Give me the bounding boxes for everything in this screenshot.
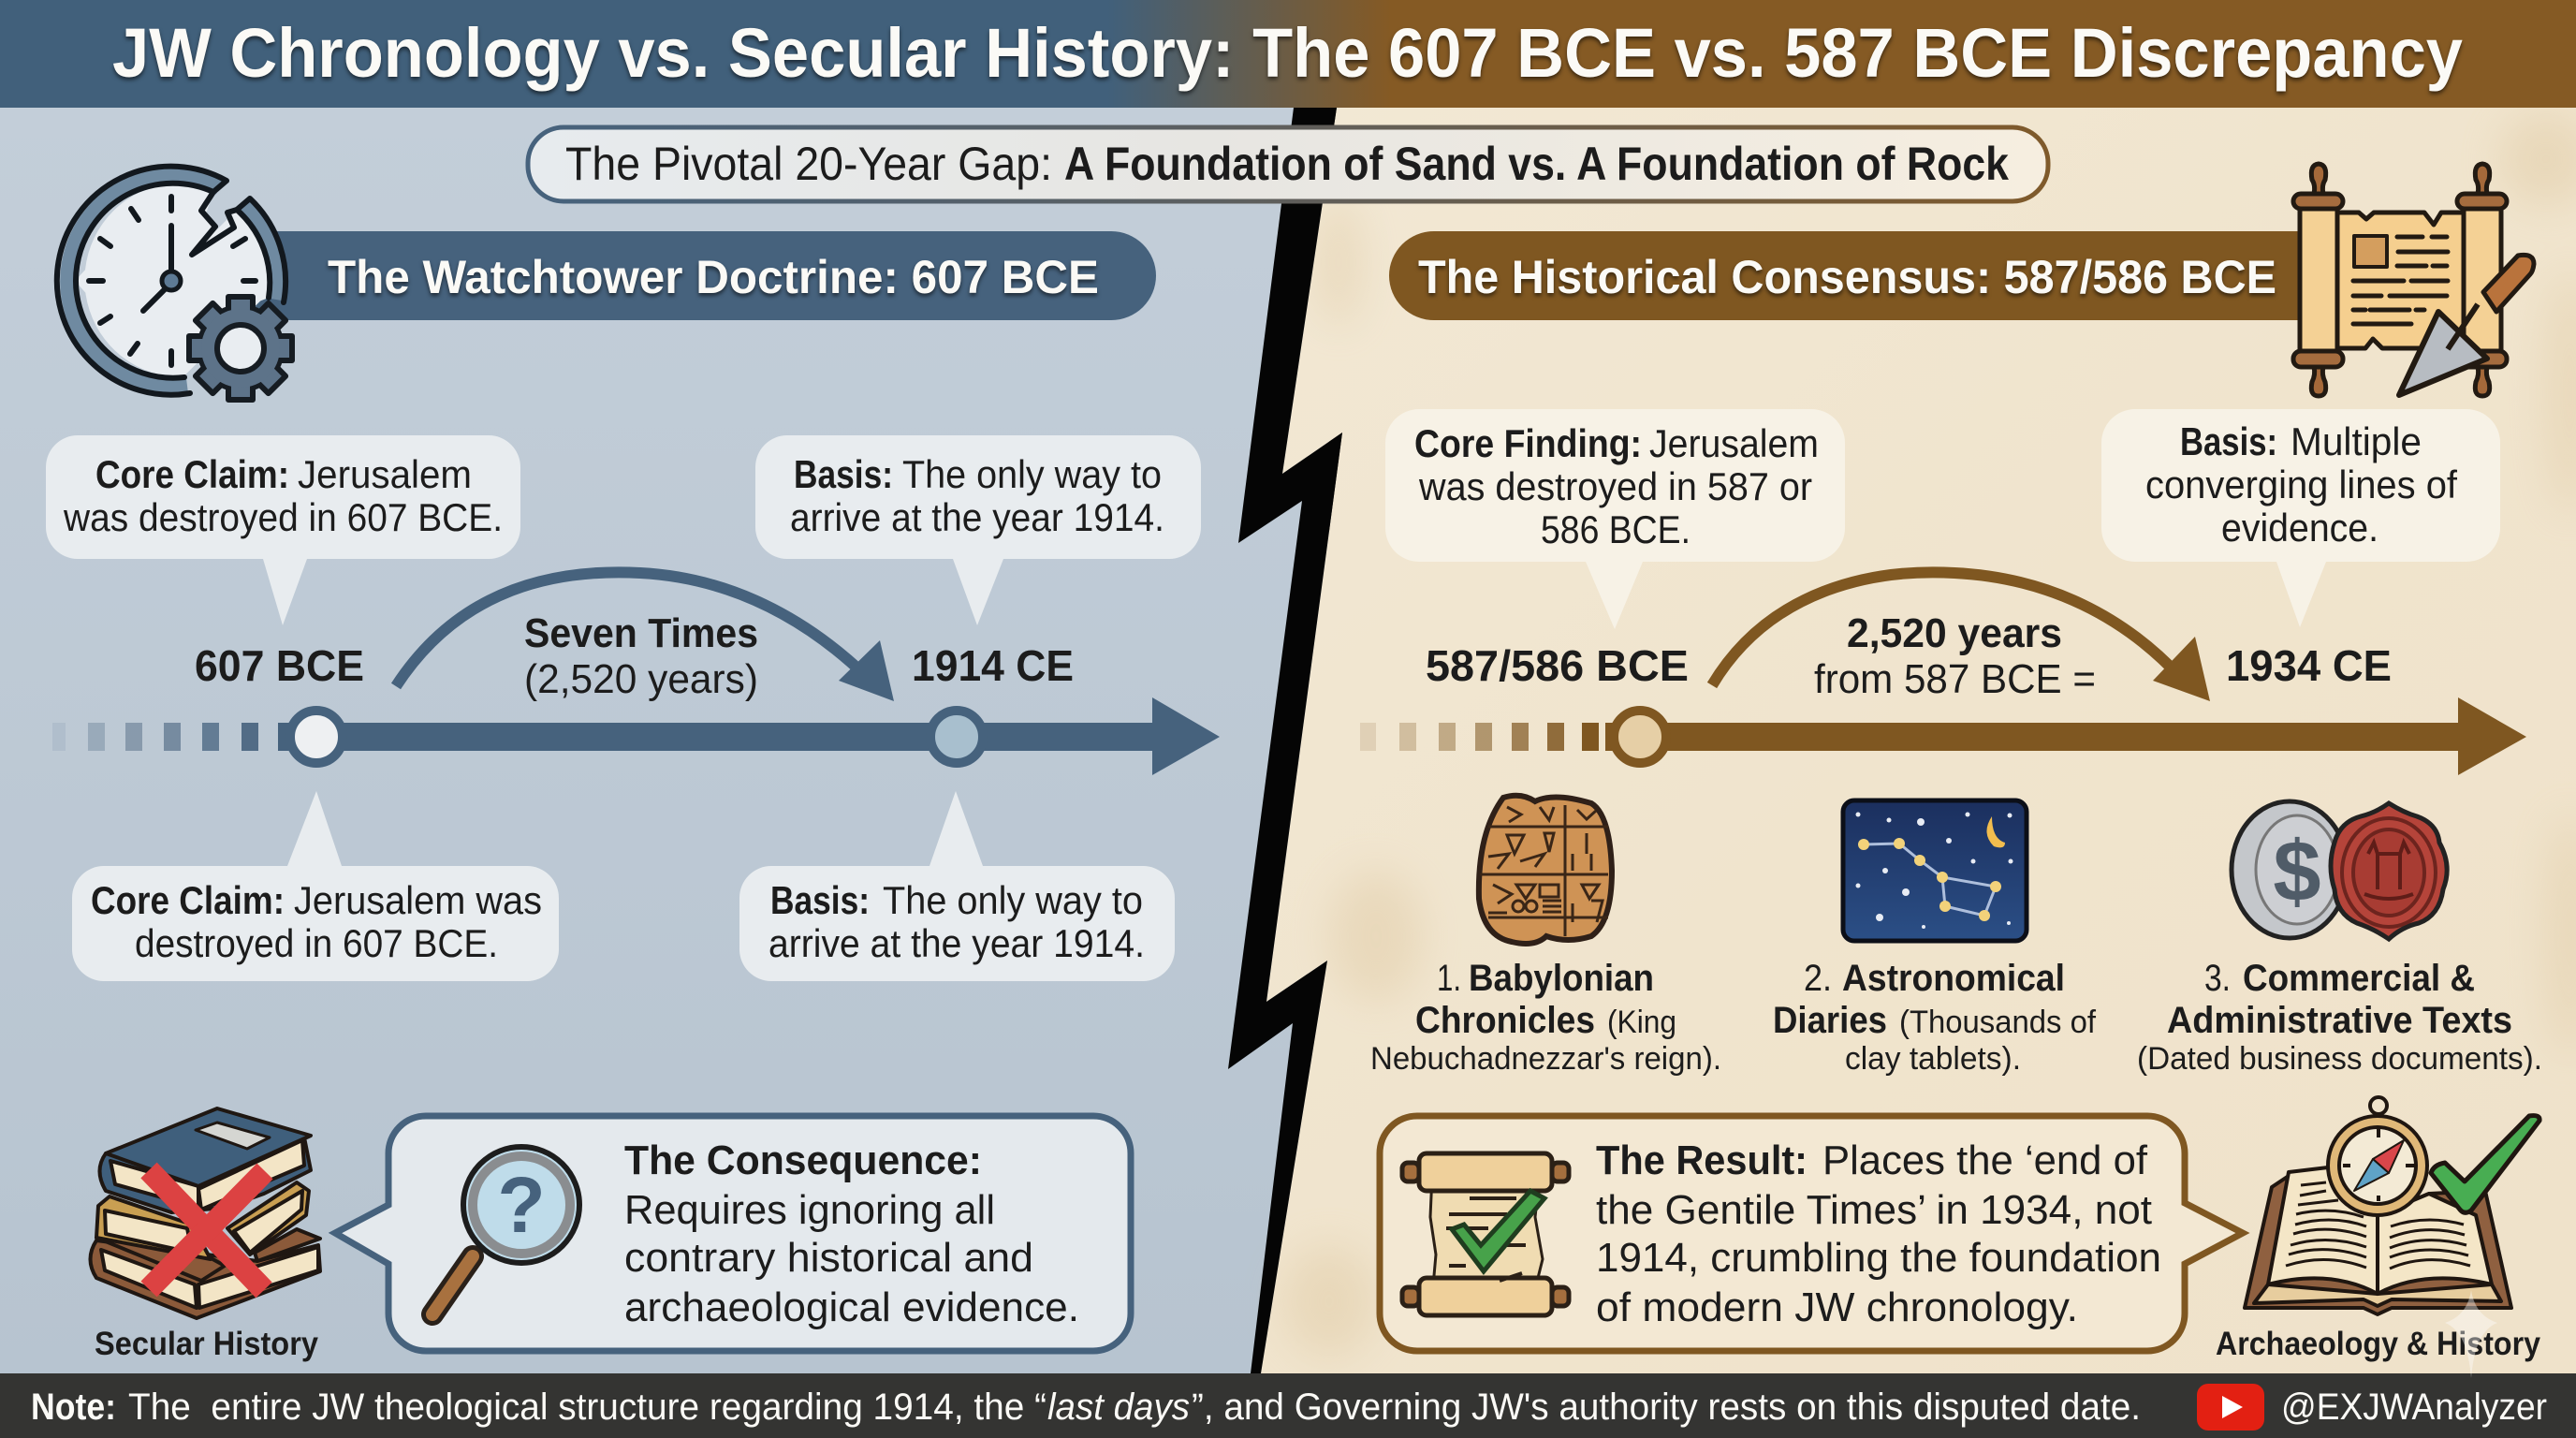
left section heading pill xyxy=(234,231,1156,320)
evidence 1 text: Chronicles xyxy=(1415,1000,1595,1041)
callout: basis right xyxy=(2101,409,2500,627)
timeline: right arrow xyxy=(1360,697,2526,775)
evidence 2 text: Diaries xyxy=(1773,1000,1887,1041)
arc arrow: 2,520 years xyxy=(1712,572,2210,701)
channel handle: @EXJWAnalyzer xyxy=(2281,1387,2547,1428)
callout: the consequence: Requires ignoring all xyxy=(624,1187,995,1233)
callout: core claim top: was destroyed in 607 BCE. xyxy=(63,495,503,539)
date label: 1914 CE: 1914 CE xyxy=(912,641,1074,690)
callout: core finding: was destroyed in 587 or xyxy=(1418,464,1812,508)
callout: core claim bottom: Core Claim: xyxy=(91,878,285,922)
callout: core finding: 586 BCE. xyxy=(1541,507,1690,551)
callout: the result: 1914, crumbling the foundation xyxy=(1596,1235,2161,1281)
lightning divider xyxy=(1228,108,1342,1373)
evidence 3 text: Administrative Texts xyxy=(2167,1000,2512,1041)
arc label: seven times: Seven Times xyxy=(524,610,758,656)
header band xyxy=(0,0,2576,108)
evidence 3 text xyxy=(2137,958,2542,1077)
callout: core claim bottom xyxy=(72,791,559,981)
label: secular history: Secular History xyxy=(95,1326,318,1362)
footer note: The entire JW theological structure regarding 1914, the “ xyxy=(128,1387,1046,1428)
date label: 607 BCE: 607 BCE xyxy=(195,641,364,690)
callout: the result: Places the ‘end of xyxy=(1822,1137,2148,1183)
callout: basis bottom xyxy=(739,791,1175,981)
callout: the consequence: archaeological evidence. xyxy=(624,1284,1079,1330)
icon: scroll with green check xyxy=(1402,1153,1569,1315)
footer note: last days xyxy=(1047,1387,1190,1428)
icon: night sky constellation xyxy=(1843,800,2027,941)
callout: basis top: The only way to xyxy=(902,452,1162,496)
callout: the result: the Gentile Times’ in 1934, not xyxy=(1596,1187,2152,1233)
arc arrow: seven times xyxy=(396,572,894,701)
icon: clay tablet xyxy=(1479,796,1612,944)
callout: basis bottom: The only way to xyxy=(883,878,1143,922)
evidence 2 text: 2. xyxy=(1804,958,1832,999)
sparkle watermark xyxy=(2445,1290,2497,1378)
callout: basis bottom: Basis: xyxy=(770,878,870,922)
evidence 1 text: (King xyxy=(1607,1005,1676,1040)
footer note: ”, and Governing JW's authority rests on this disputed date. xyxy=(1192,1387,2141,1428)
callout: core claim top: Core Claim: xyxy=(95,452,289,496)
evidence 1 text: Nebuchadnezzar's reign). xyxy=(1370,1041,1721,1077)
icon: crossed-out book stack xyxy=(90,1108,320,1318)
evidence 3 text: 3. xyxy=(2204,958,2231,999)
callout: core finding: Jerusalem xyxy=(1649,421,1819,465)
callout: core claim top: Jerusalem xyxy=(298,452,472,496)
timeline: left arrow xyxy=(52,697,1220,775)
callout: basis right: evidence. xyxy=(2221,506,2378,550)
callout: basis right: converging lines of xyxy=(2145,462,2457,506)
callout: core claim bottom: Jerusalem was xyxy=(294,878,542,922)
icon: magnifier with question mark: ? xyxy=(497,1161,546,1249)
callout: core finding xyxy=(1385,409,1845,629)
footer note xyxy=(31,1387,2141,1428)
arc label: 2,520 years xyxy=(1814,610,2096,702)
callout: the result: of modern JW chronology. xyxy=(1596,1284,2078,1330)
evidence 1 text: Babylonian xyxy=(1469,958,1654,999)
callout: basis right: Multiple xyxy=(2291,419,2422,463)
icon: coin and wax seal xyxy=(2232,801,2447,939)
subtitle pill xyxy=(528,127,2048,201)
icon: cracked clock with gear xyxy=(57,167,292,400)
footer bar xyxy=(0,1373,2576,1438)
callout: basis top xyxy=(755,435,1201,625)
arc label: 2,520 years: from 587 BCE = xyxy=(1814,656,2096,702)
callout: the consequence: contrary historical and xyxy=(624,1235,1033,1281)
evidence 1 text: 1. xyxy=(1437,958,1461,999)
footer note: Note: xyxy=(31,1387,116,1428)
callout: the consequence xyxy=(335,1116,1131,1351)
callout: the consequence: The Consequence: xyxy=(624,1137,982,1183)
title: JW Chronology vs. Secular History: The 607 BCE vs. 587 BCE Discrepancy xyxy=(112,14,2463,92)
icon: magnifier with question mark xyxy=(432,1147,579,1314)
icon: open book with compass and check xyxy=(2245,1097,2539,1314)
left section heading pill: The Watchtower Doctrine: 607 BCE xyxy=(328,251,1099,303)
callout: basis right: Basis: xyxy=(2180,419,2277,463)
evidence 2 text: Astronomical xyxy=(1842,958,2065,999)
evidence 2 text xyxy=(1773,958,2097,1077)
icon: scroll and trowel xyxy=(2293,164,2534,396)
label: archaeology and history: Archaeology & History xyxy=(2216,1326,2540,1362)
callout: core claim bottom: destroyed in 607 BCE. xyxy=(135,921,498,965)
arc label: seven times: (2,520 years) xyxy=(524,656,758,702)
panel: parchment right background xyxy=(1261,108,2576,1373)
right section heading pill: The Historical Consensus: 587/586 BCE xyxy=(1418,251,2276,303)
icon: youtube logo xyxy=(2197,1384,2264,1431)
subtitle pill: A Foundation of Sand vs. A Foundation of Rock xyxy=(1064,138,2009,190)
evidence 2 text: clay tablets). xyxy=(1845,1041,2021,1077)
date label: 1934 CE: 1934 CE xyxy=(2226,641,2392,690)
callout: basis top: Basis: xyxy=(794,452,893,496)
evidence 1 text xyxy=(1370,958,1721,1077)
callout: core claim top xyxy=(46,435,520,625)
right section heading pill xyxy=(1389,231,2312,320)
callout: the result xyxy=(1380,1116,2243,1351)
date label: 587/586 BCE: 587/586 BCE xyxy=(1426,641,1689,690)
evidence 3 text: Commercial & xyxy=(2243,958,2475,999)
evidence 3 text: (Dated business documents). xyxy=(2137,1041,2542,1077)
callout: basis bottom: arrive at the year 1914. xyxy=(768,921,1145,965)
callout: core finding: Core Finding: xyxy=(1414,421,1642,465)
subtitle pill: The Pivotal 20-Year Gap: xyxy=(565,138,1052,190)
arc label: seven times xyxy=(524,610,758,702)
evidence 2 text: (Thousands of xyxy=(1899,1005,2097,1040)
callout: the result: The Result: xyxy=(1596,1137,1808,1183)
icon: coin and wax seal: $ xyxy=(2273,824,2321,919)
panel: secular-blue left background xyxy=(0,108,1329,1373)
callout: basis top: arrive at the year 1914. xyxy=(790,495,1164,539)
arc label: 2,520 years: 2,520 years xyxy=(1847,610,2062,656)
